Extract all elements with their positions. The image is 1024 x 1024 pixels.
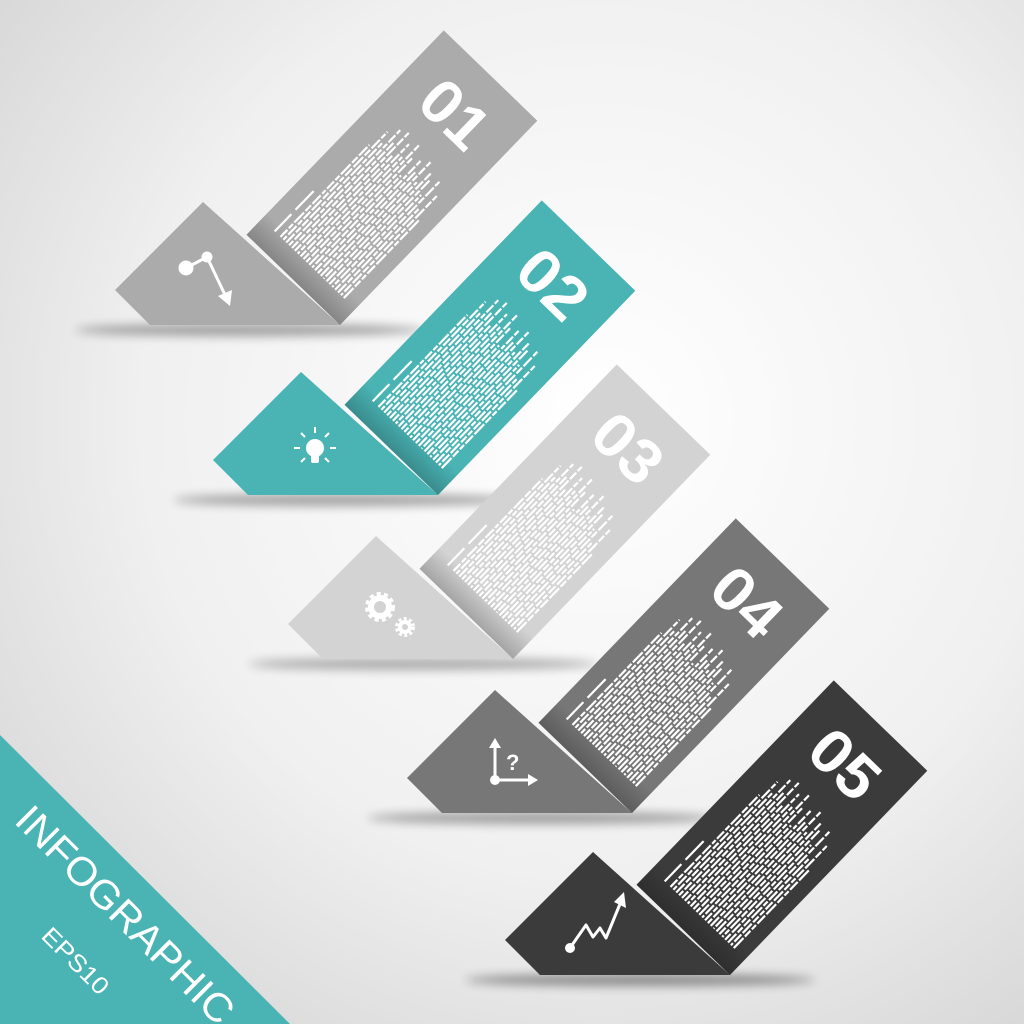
corner banner: INFOGRAPHIC EPS10: EPS10 <box>36 922 114 1001</box>
icon: light bulb <box>294 427 336 463</box>
icon: path arrow <box>180 253 232 306</box>
item 03 <box>248 364 710 670</box>
item 02: 02 <box>502 235 602 335</box>
icon: gears <box>367 594 414 636</box>
icon: growth chart <box>565 892 626 953</box>
item 04 <box>367 518 829 824</box>
item 03: 03 <box>577 399 677 499</box>
item 05: 05 <box>794 715 894 815</box>
icon: axes with question mark: ? <box>506 750 519 775</box>
icon: axes with question mark <box>489 738 538 786</box>
item 05 <box>465 680 927 986</box>
item 02 <box>173 200 635 506</box>
item 01 <box>75 30 537 336</box>
corner banner: INFOGRAPHIC EPS10 <box>0 735 290 1024</box>
item 01: 01 <box>405 66 503 164</box>
item 04: 04 <box>696 553 796 653</box>
corner banner: INFOGRAPHIC EPS10: INFOGRAPHIC <box>7 797 243 1024</box>
